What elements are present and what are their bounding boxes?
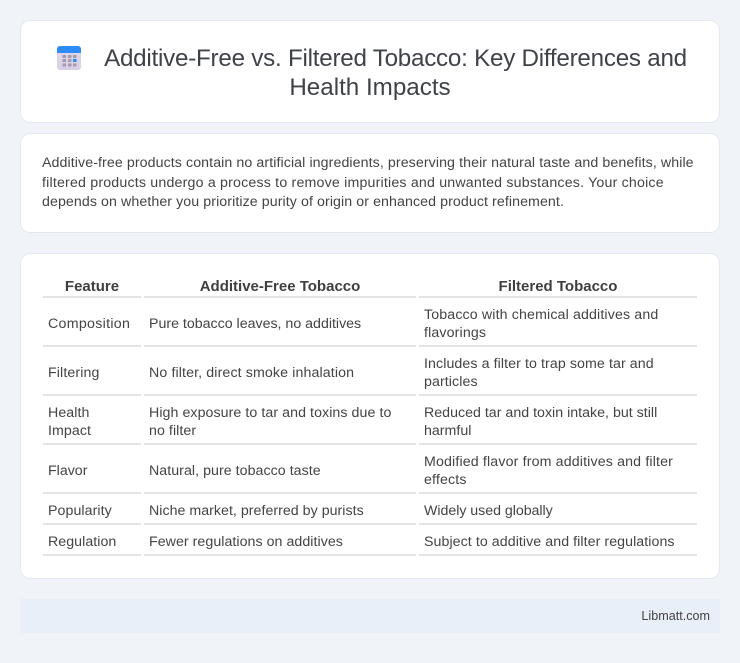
- intro paragraph: [42, 155, 694, 210]
- comparison table: Popularity: [48, 503, 112, 519]
- comparison table: Flavor: [48, 463, 87, 479]
- comparison table: Filtered Tobacco: [499, 278, 617, 295]
- comparison table: Tobacco with chemical additives and: [424, 307, 658, 323]
- panel: intro text card: [20, 133, 720, 233]
- row: health impact: [48, 405, 657, 439]
- comparison table: particles: [424, 374, 478, 390]
- title: Additive-Free vs. Filtered Tobacco: Key Differences and: [104, 45, 687, 72]
- row: flavor: [48, 454, 673, 488]
- comparison table: Health: [48, 405, 89, 421]
- comparison table: Natural, pure tobacco taste: [149, 463, 321, 479]
- comparison table: Fewer regulations on additives: [149, 534, 343, 550]
- row: filtering: [48, 356, 654, 390]
- title: Health Impacts: [289, 74, 451, 101]
- footer source text: Libmatt.com: [641, 609, 710, 623]
- row: composition: [48, 307, 658, 341]
- title: [104, 45, 687, 101]
- comparison table: effects: [424, 472, 467, 488]
- row: regulation: [48, 534, 675, 550]
- row: popularity: [48, 503, 553, 519]
- comparison table: harmful: [424, 423, 471, 439]
- comparison table: Composition: [48, 316, 130, 332]
- intro paragraph: filtered products undergo a process to remove impurities and unwanted substances. Your choice: [42, 174, 664, 190]
- comparison table: High exposure to tar and toxins due to: [149, 405, 391, 421]
- icon: calendar: [57, 46, 81, 70]
- comparison table: Includes a filter to trap some tar and: [424, 356, 654, 372]
- comparison table: Widely used globally: [424, 503, 553, 519]
- comparison table: Feature: [65, 278, 119, 295]
- table header: [65, 278, 617, 295]
- comparison table: Impact: [48, 423, 91, 439]
- footer bar: [20, 599, 720, 633]
- comparison table: flavorings: [424, 325, 486, 341]
- comparison table: no filter: [149, 423, 196, 439]
- comparison table: Niche market, preferred by purists: [149, 503, 364, 519]
- comparison table: Pure tobacco leaves, no additives: [149, 316, 361, 332]
- intro paragraph: depends on whether you prioritize purity of origin or enhanced product refinement.: [42, 194, 564, 210]
- comparison table: No filter, direct smoke inhalation: [149, 365, 354, 381]
- comparison table: Filtering: [48, 365, 100, 381]
- comparison table: Modified flavor from additives and filter: [424, 454, 673, 470]
- comparison table: Subject to additive and filter regulations: [424, 534, 675, 550]
- comparison table: Reduced tar and toxin intake, but still: [424, 405, 657, 421]
- panel: comparison table card: [20, 253, 720, 579]
- intro paragraph: Additive-free products contain no artificial ingredients, preserving their natural taste and benefits, while: [42, 155, 694, 171]
- comparison table: Additive-Free Tobacco: [200, 278, 360, 295]
- comparison table: Regulation: [48, 534, 116, 550]
- panel: title card: [20, 20, 720, 123]
